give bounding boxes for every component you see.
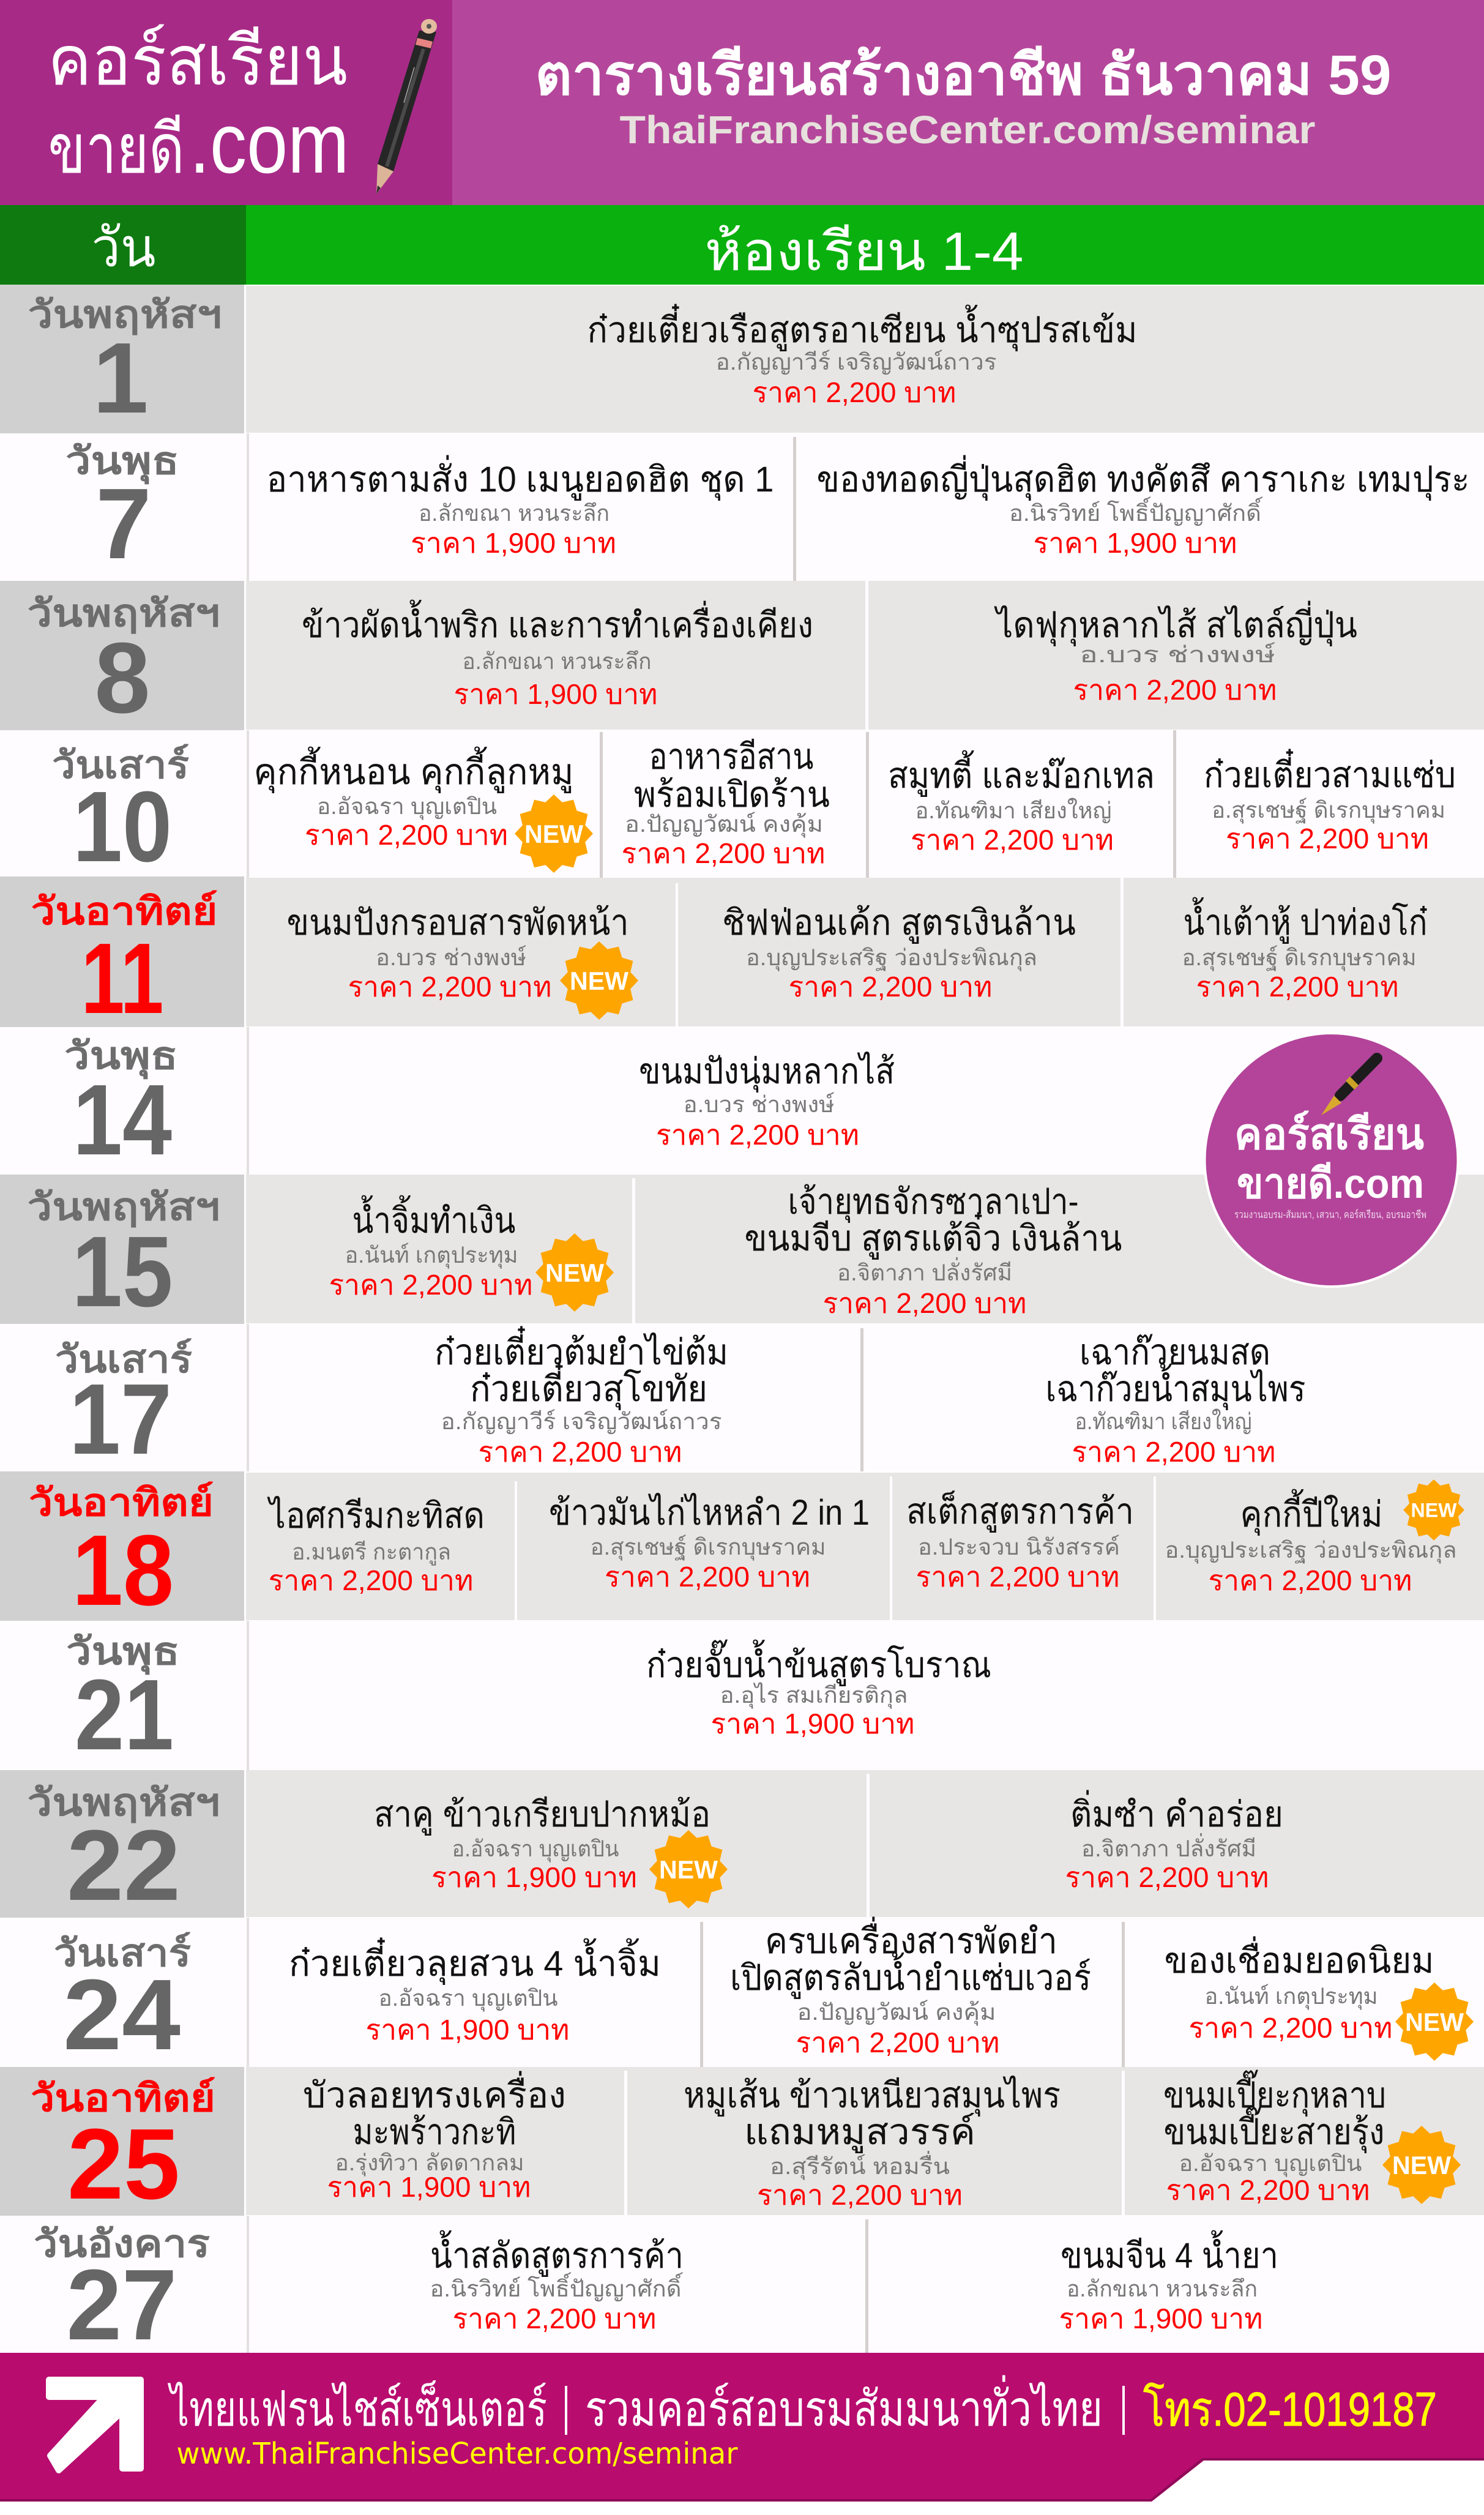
- panel: brand: ขายดี: [48, 111, 185, 187]
- class: เฉาก๊วยน้ำสมุนไพร: [1045, 1364, 1306, 1411]
- class: [994, 600, 1357, 706]
- class: ก๋วยเตี๋ยวสุโขทัย: [470, 1362, 707, 1411]
- class: อ.ปัญญวัฒน์ คงคุ้ม: [625, 812, 823, 838]
- class: [906, 1490, 1134, 1593]
- class: [1182, 897, 1427, 1003]
- class: คุกกี้ปีใหม่: [1240, 1489, 1383, 1536]
- class: ราคา 2,200 บาท: [453, 2303, 656, 2334]
- class: ราคา 2,200 บาท: [911, 824, 1114, 856]
- class: ราคา 2,200 บาท: [1072, 1436, 1275, 1468]
- class: ไอศกรีมกะทิสด: [267, 1495, 485, 1536]
- panel: brand: .com: [190, 95, 349, 191]
- badge: new: [649, 1830, 728, 1908]
- day label: [28, 294, 222, 434]
- class: สมูทตี้ และม๊อกเทล: [888, 750, 1155, 797]
- day label: วันเสาร์: [55, 1338, 192, 1381]
- class: ราคา 2,200 บาท: [1188, 2012, 1393, 2044]
- day label: 17: [69, 1363, 172, 1475]
- row: day 17: [0, 1324, 1484, 1475]
- class: อ.จิตาภา ปลั่งรัศมี: [1081, 1833, 1256, 1861]
- day label: [54, 1932, 191, 2071]
- class: อ.บุญประเสริฐ ว่องประพิณกุล: [1165, 1538, 1456, 1564]
- day label: [52, 744, 189, 883]
- class: ราคา 2,200 บาท: [1208, 1564, 1412, 1596]
- day label: วันพุธ: [66, 1631, 180, 1675]
- class: อ.บุญประเสริฐ ว่องประพิณกุล: [746, 945, 1037, 971]
- day label: [31, 890, 218, 1034]
- class: ราคา 1,900 บาท: [431, 1861, 637, 1893]
- day label: 8: [94, 622, 151, 734]
- day label: 21: [75, 1659, 174, 1771]
- class: อ.นันท์ เกตุประทุม: [345, 1243, 518, 1269]
- class: อ.มนตรี กะตากูล: [292, 1539, 451, 1566]
- logo badge: circle: คอร์สเรียน: [1234, 1110, 1424, 1158]
- footer text: โทร.02-1019187: [1143, 2382, 1437, 2436]
- panel: title: ThaiFranchiseCenter.com/seminar: [619, 108, 1316, 152]
- day label: 24: [63, 1959, 181, 2071]
- class: อาหารตามสั่ง 10 เมนูยอดฮิต ชุด 1: [267, 455, 774, 501]
- class: อ.สุรเชษฐ์ ดิเรกบุษราคม: [1212, 798, 1445, 824]
- footer text: www.ThaiFranchiseCenter.com/seminar: [176, 2437, 738, 2471]
- class: ข้าวผัดน้ำพริก และการทำเครื่องเคียง: [302, 600, 813, 645]
- class: [1059, 2230, 1278, 2334]
- class: ขนมจีน 4 น้ำยา: [1061, 2230, 1278, 2276]
- class: ราคา 2,200 บาท: [1073, 674, 1277, 706]
- class: [722, 903, 1076, 1003]
- class: ราคา 2,200 บาท: [1196, 971, 1399, 1003]
- class: ของเชื่อมยอดนิยม: [1164, 1936, 1434, 1981]
- day label: วันพฤหัสฯ: [27, 592, 220, 635]
- class: [816, 455, 1470, 559]
- class: [253, 747, 574, 851]
- class: อ.นิรวิทย์ โพธิ์ปัญญาศักดิ์: [430, 2272, 684, 2302]
- day label: วันอาทิตย์: [31, 890, 218, 933]
- class: [1204, 749, 1456, 854]
- class: ราคา 2,200 บาท: [605, 1561, 810, 1593]
- icon: arrow: [49, 2380, 141, 2470]
- class: อ.ปัญญวัฒน์ คงคุ้ม: [797, 2000, 996, 2026]
- class: ราคา 2,200 บาท: [757, 2179, 963, 2211]
- class: อ.ทัณฑิมา เสียงใหญ่: [915, 798, 1111, 824]
- class: [302, 600, 813, 710]
- class: สเต็กสูตรการค้า: [906, 1490, 1134, 1533]
- day label: วันพฤหัสฯ: [28, 294, 222, 336]
- class: สาคู ข้าวเกรียบปากหม้อ: [374, 1795, 710, 1836]
- badge: new: [1382, 2126, 1461, 2204]
- class: แถมหมูสวรรค์: [744, 2112, 975, 2153]
- day label: 18: [72, 1514, 174, 1626]
- header banner: [0, 0, 1484, 205]
- class: [587, 304, 1137, 408]
- class: ราคา 1,900 บาท: [327, 2171, 531, 2203]
- class: ราคา 1,900 บาท: [366, 2014, 569, 2046]
- day label: 11: [81, 922, 164, 1034]
- footer text: [167, 2375, 1437, 2471]
- badge: new: [560, 941, 638, 1020]
- class: อ.ลักขณา หวนระลึก: [463, 649, 651, 674]
- class: ราคา 2,200 บาท: [656, 1119, 859, 1151]
- class: เจ้ายุทธจักรซาลาเปา-: [788, 1182, 1078, 1224]
- class: ราคา 2,200 บาท: [1166, 2174, 1370, 2206]
- class: ราคา 2,200 บาท: [348, 971, 552, 1003]
- class: ติ่มซำ คำอร่อย: [1070, 1790, 1283, 1834]
- class: [267, 455, 774, 559]
- class: [1165, 1489, 1456, 1596]
- class: อ.กัญญาวีร์ เจริญวัฒน์ถาวร: [716, 349, 996, 375]
- class: [289, 1937, 661, 2046]
- day label: 10: [73, 771, 172, 883]
- class: อ.อัจฉรา บุญเตปิน: [1179, 2151, 1362, 2177]
- panel: brand: [0, 0, 452, 205]
- class: ราคา 2,200 บาท: [915, 1561, 1120, 1593]
- row: day 27: [0, 2216, 1484, 2361]
- logo badge: circle: [1203, 1032, 1459, 1288]
- logo badge: circle: รวมงานอบรม-สัมมนา, เสวนา, คอร์สเรียน, อบรมอาชีพ: [1234, 1209, 1426, 1220]
- class: เฉาก๊วยนมสด: [1079, 1332, 1270, 1372]
- day label: วันเสาร์: [54, 1932, 191, 1975]
- day label: 25: [67, 2108, 180, 2220]
- day label: 27: [66, 2249, 177, 2361]
- day label: วันพุธ: [65, 440, 179, 484]
- day label: [55, 1338, 192, 1475]
- class: อ.สุรเชษฐ์ ดิเรกบุษราคม: [1182, 945, 1416, 971]
- class: อ.ลักขณา หวนระลึก: [1067, 2276, 1258, 2301]
- day label: [27, 1186, 220, 1328]
- day label: 15: [72, 1216, 173, 1328]
- badge: new: NEW: [1405, 2008, 1464, 2036]
- badge: new: [515, 794, 593, 873]
- class: ครบเครื่องสารพัดยำ: [765, 1916, 1057, 1961]
- class: ชิฟฟ่อนเค้ก สูตรเงินล้าน: [722, 903, 1076, 944]
- icon: fountain pen: [1321, 1058, 1377, 1115]
- class: ราคา 2,200 บาท: [268, 1564, 474, 1596]
- class: ราคา 2,200 บาท: [1226, 823, 1429, 854]
- row: day 14: [0, 1027, 1484, 1176]
- badge: new: NEW: [545, 1258, 604, 1287]
- class: ราคา 2,200 บาท: [788, 971, 993, 1003]
- class: ขนมปังกรอบสารพัดหน้า: [286, 903, 629, 943]
- class: [888, 750, 1155, 856]
- icon: pencil: [376, 19, 437, 194]
- class: [744, 1182, 1122, 1319]
- class: ราคา 1,900 บาท: [411, 527, 616, 559]
- class: อ.สุรีรัตน์ หอมรื่น: [770, 2150, 950, 2180]
- badge: new: [1395, 1982, 1474, 2061]
- footer banner: [0, 2353, 1484, 2502]
- class: พร้อมเปิดร้าน: [634, 775, 830, 815]
- day label: วันอังคาร: [34, 2223, 210, 2265]
- class: เปิดสูตรลับน้ำยำแซ่บเวอร์: [730, 1953, 1091, 1999]
- class: ราคา 2,200 บาท: [622, 837, 825, 869]
- class: อ.อุไร สมเกียรติกุล: [720, 1682, 908, 1709]
- badge: new: [1403, 1479, 1464, 1541]
- class: อ.รุ่งทิวา ลัดดากลม: [335, 2150, 524, 2177]
- row: day 8: [0, 581, 1484, 734]
- class: [434, 1326, 728, 1468]
- class: ก๋วยเตี๋ยวลุยสวน 4 น้ำจิ้ม: [289, 1937, 661, 1986]
- row: day 15: [0, 1175, 1484, 1328]
- class: [549, 1492, 870, 1593]
- class: [286, 903, 629, 1003]
- class: อ.ทัณฑิมา เสียงใหญ่: [1075, 1408, 1252, 1435]
- class: ราคา 2,200 บาท: [753, 376, 956, 408]
- class: ขนมปังนุ่มหลากไส้: [639, 1051, 895, 1093]
- logo badge: circle: ขายดี.com: [1237, 1160, 1424, 1207]
- class: [1164, 1936, 1434, 2044]
- class: [730, 1916, 1091, 2058]
- day label: วันพฤหัสฯ: [27, 1782, 220, 1824]
- day label: [27, 1782, 220, 1921]
- class: ราคา 1,900 บาท: [711, 1708, 914, 1740]
- class: น้ำจิ้มทำเงิน: [352, 1195, 515, 1241]
- class: อ.กัญญาวีร์ เจริญวัฒน์ถาวร: [441, 1409, 722, 1435]
- footer text: รวมคอร์สอบรมสัมมนาทั่วไทย: [585, 2375, 1103, 2436]
- class: ราคา 2,200 บาท: [796, 2027, 1000, 2058]
- class: อ.นิรวิทย์ โพธิ์ปัญญาศักดิ์: [1009, 496, 1263, 526]
- day label: วันพฤหัสฯ: [27, 1186, 220, 1228]
- table header: วัน: [92, 217, 155, 278]
- day label: วันเสาร์: [52, 744, 189, 787]
- row: day 21: [0, 1621, 1484, 1771]
- day label: วันอาทิตย์: [31, 2077, 215, 2120]
- row: day 18: [0, 1471, 1484, 1626]
- row: day 24: [0, 1916, 1484, 2071]
- class: [1045, 1332, 1306, 1468]
- class: ราคา 2,200 บาท: [822, 1287, 1027, 1319]
- class: ก๋วยจั๊บน้ำข้นสูตรโบราณ: [646, 1639, 991, 1686]
- class: อ.บวร ช่างพงษ์: [376, 945, 526, 970]
- day label: [29, 1481, 214, 1626]
- class: ก๋วยเตี๋ยวเรือสูตรอาเซียน น้ำซุปรสเข้ม: [587, 304, 1137, 352]
- table header: [0, 205, 1484, 285]
- class: [303, 2071, 566, 2203]
- class: อ.อัจฉรา บุญเตปิน: [317, 794, 497, 820]
- day label: 1: [92, 322, 149, 434]
- class: อ.บวร ช่างพงษ์: [1079, 642, 1275, 667]
- badge: new: NEW: [524, 820, 583, 848]
- class: [639, 1051, 895, 1151]
- class: ราคา 1,900 บาท: [454, 678, 657, 710]
- class: อ.ประจวบ นิรังสรรค์: [918, 1534, 1120, 1560]
- class: [684, 2075, 1061, 2211]
- day label: [31, 2077, 215, 2220]
- class: ไดฟุกุหลากไส้ สไตล์ญี่ปุ่น: [994, 600, 1357, 647]
- badge: new: NEW: [570, 966, 628, 995]
- class: มะพร้าวกะทิ: [352, 2112, 516, 2152]
- badge: new: NEW: [1411, 1499, 1457, 1522]
- badge: new: [535, 1233, 614, 1312]
- class: [1163, 2069, 1386, 2206]
- class: [267, 1495, 485, 1596]
- panel: brand: คอร์สเรียน: [48, 23, 348, 99]
- day label: [65, 440, 179, 580]
- class: [646, 1639, 991, 1740]
- day label: [34, 2223, 210, 2361]
- class: ขนมเปี๊ยะกุหลาบ: [1163, 2069, 1386, 2117]
- class: อ.สุรเชษฐ์ ดิเรกบุษราคม: [590, 1534, 826, 1561]
- class: อ.บวร ช่างพงษ์: [683, 1092, 835, 1117]
- day label: 7: [95, 468, 152, 580]
- class: ขนมจีบ สูตรแต้จิ๋ว เงินล้าน: [744, 1212, 1122, 1260]
- class: อาหารอีสาน: [649, 737, 814, 777]
- row: day 25: [0, 2067, 1484, 2220]
- class: ราคา 1,900 บาท: [1059, 2303, 1263, 2334]
- day label: 14: [73, 1064, 172, 1176]
- row: day 11: [0, 876, 1484, 1034]
- class: [374, 1795, 710, 1893]
- badge: new: NEW: [1392, 2151, 1451, 2180]
- class: อ.อัจฉรา บุญเตปิน: [452, 1836, 619, 1863]
- footer text: ไทยแฟรนไชส์เซ็นเตอร์: [167, 2380, 547, 2436]
- class: ขนมเปี๊ยะสายรุ้ง: [1164, 2106, 1384, 2154]
- class: หมูเส้น ข้าวเหนียวสมุนไพร: [684, 2075, 1061, 2117]
- class: ข้าวมันไก่ไหหลำ 2 in 1: [549, 1492, 870, 1533]
- class: ราคา 2,200 บาท: [479, 1436, 682, 1468]
- class: คุกกี้หนอน คุกกี้ลูกหมู: [253, 747, 574, 794]
- row: day 1: [0, 285, 1484, 434]
- day label: วันพุธ: [64, 1035, 178, 1079]
- panel: title: [452, 0, 1484, 205]
- class: ราคา 2,200 บาท: [1065, 1861, 1269, 1893]
- class: น้ำเต้าหู้ ปาท่องโก๋: [1184, 897, 1427, 944]
- row: day 22: [0, 1770, 1484, 1921]
- class: [329, 1195, 532, 1301]
- class: [622, 737, 830, 869]
- class: ก๋วยเตี๋ยวต้มยำไข่ต้ม: [434, 1326, 728, 1372]
- day label: วันอาทิตย์: [29, 1481, 214, 1524]
- class: ราคา 2,200 บาท: [329, 1269, 532, 1301]
- day label: 22: [67, 1809, 181, 1921]
- class: ราคา 1,900 บาท: [1033, 527, 1237, 559]
- panel: title: ตารางเรียนสร้างอาชีพ ธันวาคม 59: [535, 44, 1392, 107]
- day label: [27, 592, 220, 734]
- badge: new: NEW: [659, 1855, 718, 1884]
- class: อ.อัจฉรา บุญเตปิน: [378, 1986, 558, 2012]
- table header: ห้องเรียน 1-4: [705, 221, 1023, 282]
- class: บัวลอยทรงเครื่อง: [303, 2071, 566, 2115]
- class: [430, 2230, 684, 2334]
- class: น้ำสลัดสูตรการค้า: [430, 2230, 684, 2277]
- row: day 7: [0, 433, 1484, 581]
- class: ก๋วยเตี๋ยวสามแซ่บ: [1204, 749, 1456, 795]
- class: อ.นันท์ เกตุประทุม: [1204, 1984, 1378, 2010]
- class: อ.จิตาภา ปลั่งรัศมี: [837, 1257, 1012, 1285]
- class: อ.ลักขณา หวนระลึก: [419, 501, 610, 526]
- class: [1065, 1790, 1283, 1893]
- class: ราคา 2,200 บาท: [305, 819, 508, 851]
- row: day 10: [0, 730, 1484, 883]
